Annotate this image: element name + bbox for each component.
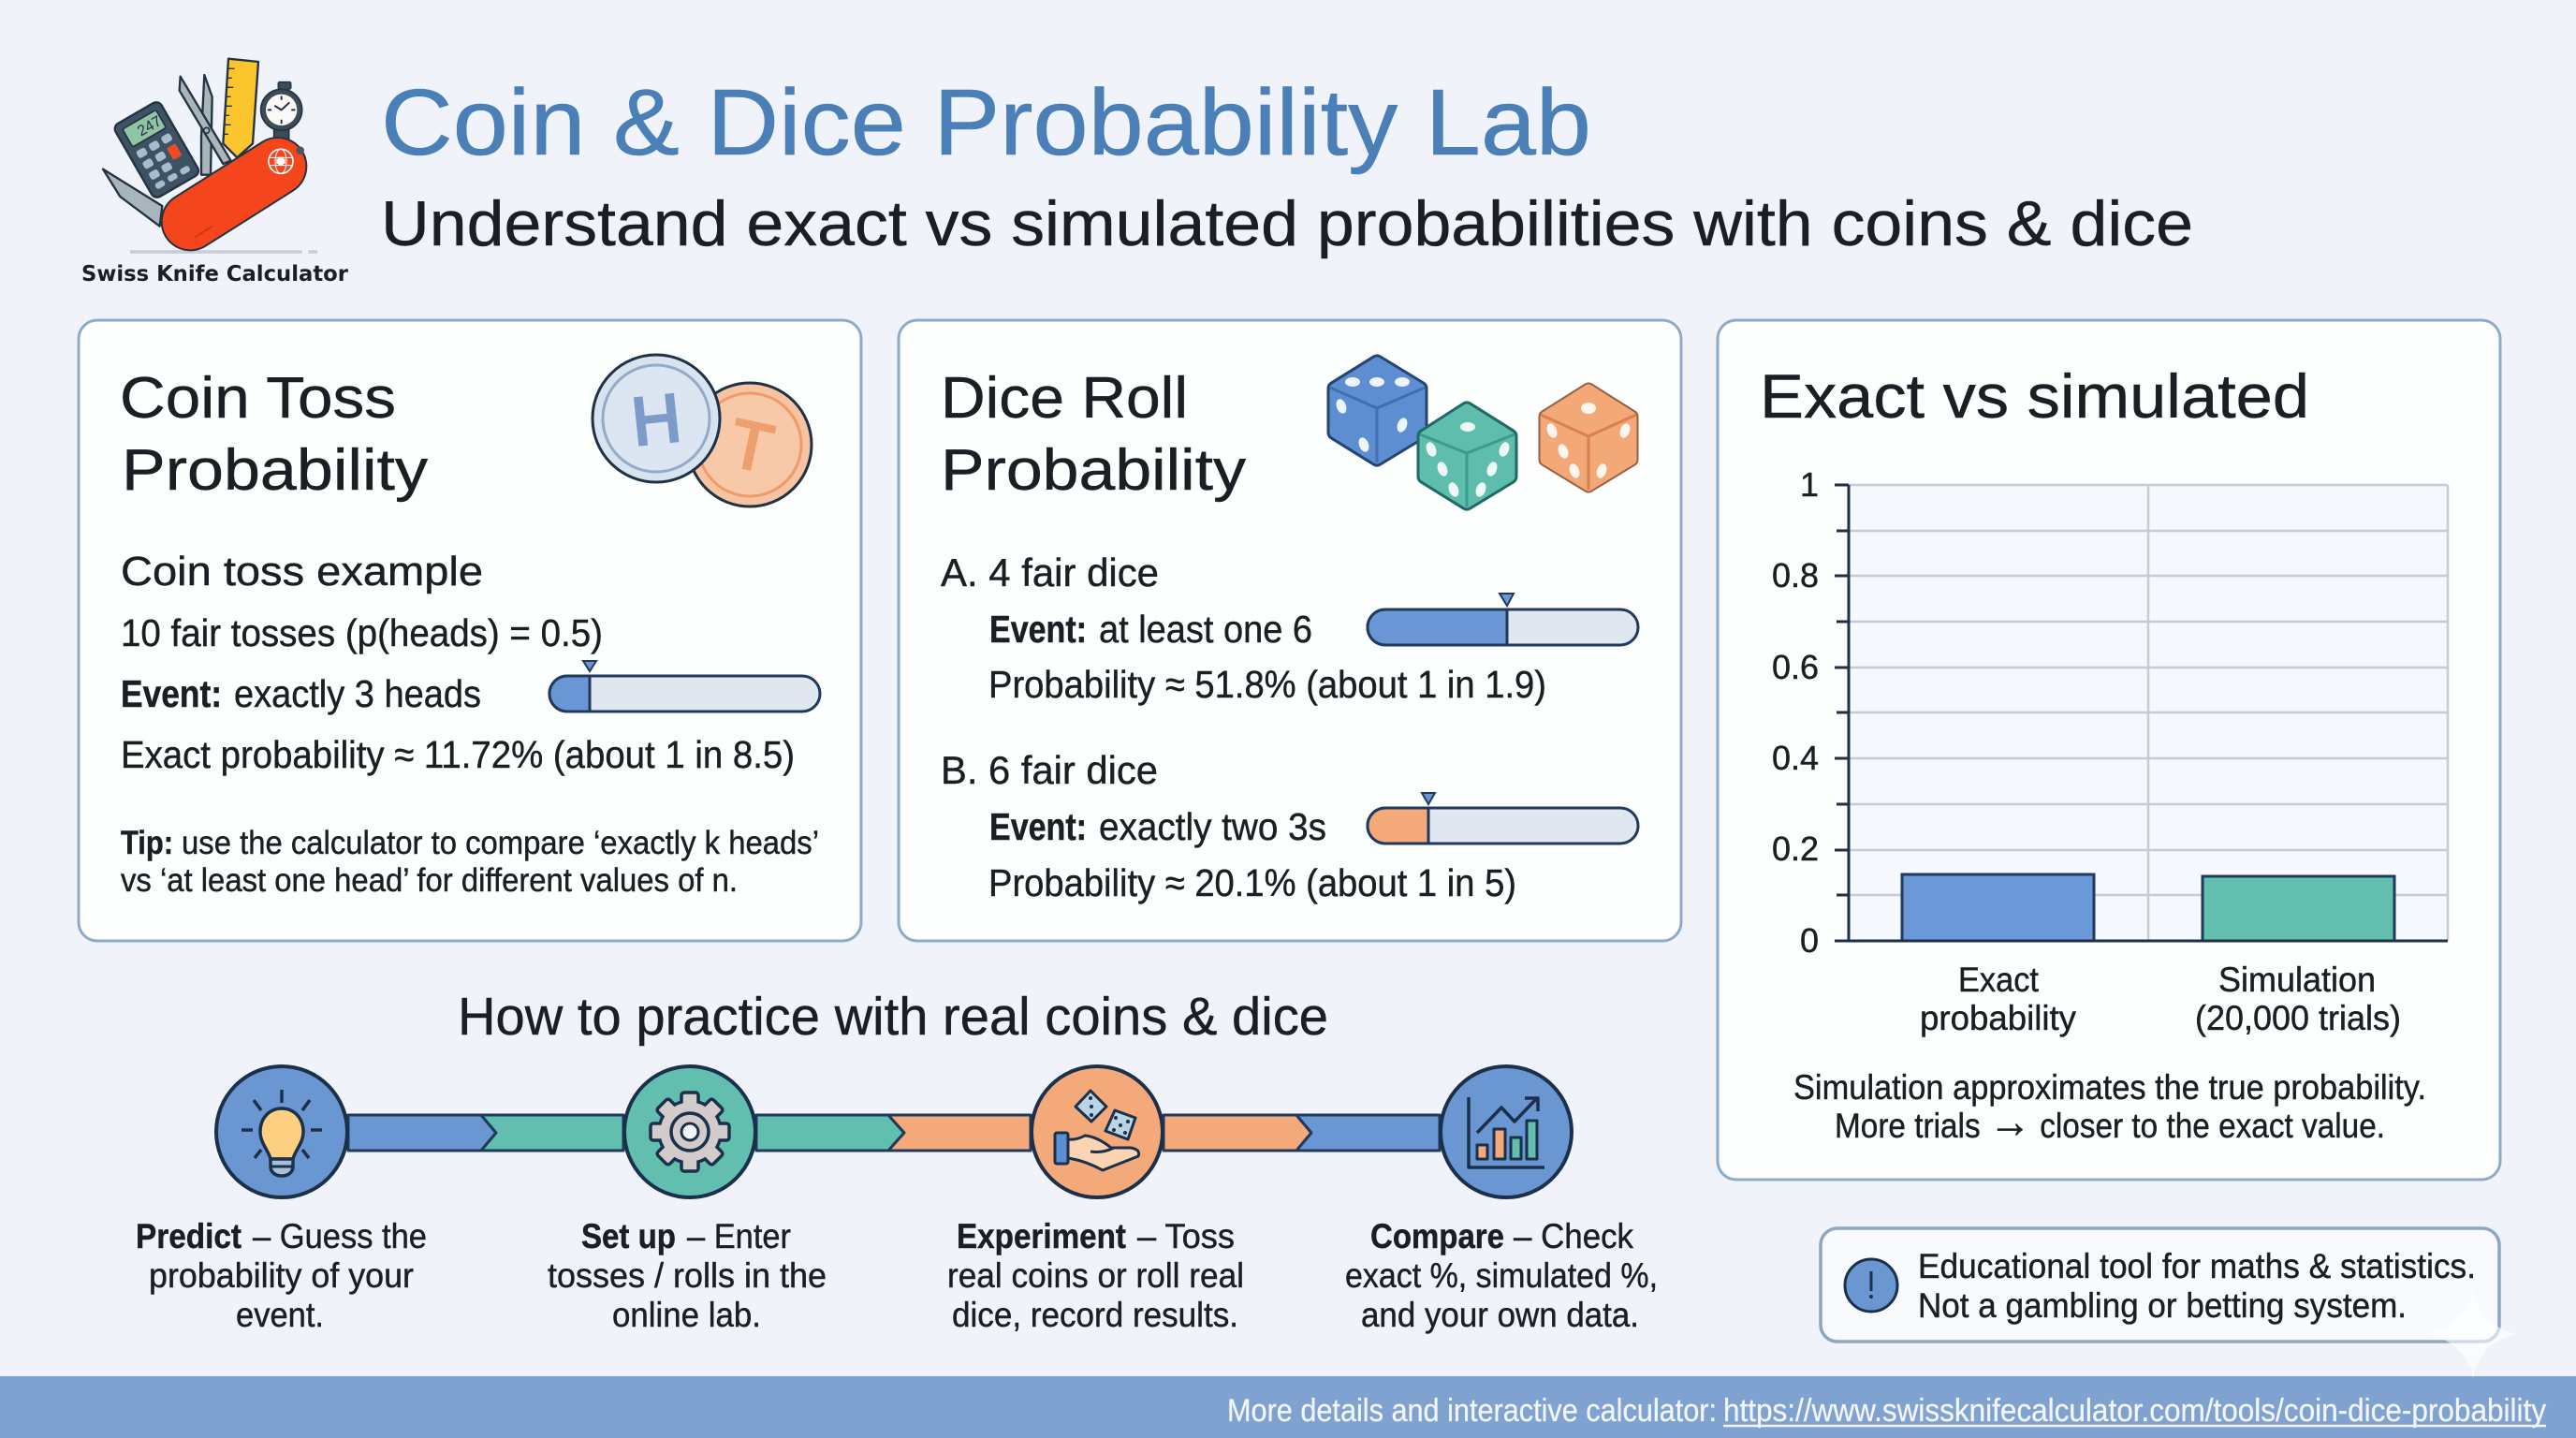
coin toss example text: Event:: [121, 672, 222, 715]
panel: coin toss probability: [79, 320, 861, 941]
step text: compare: [1345, 1217, 1658, 1334]
section B text: Probability ≈ 20.1% (about 1 in 5): [988, 861, 1516, 904]
section A text: Probability ≈ 51.8% (about 1 in 1.9): [988, 663, 1546, 706]
y axis labels: 0.2: [1772, 829, 1819, 868]
process timeline: [216, 1066, 1572, 1197]
icon: exclamation: [1845, 1259, 1897, 1312]
section B text: B. 6 fair dice: [941, 748, 1158, 792]
step text: experiment: dice, record results.: [952, 1296, 1238, 1334]
section B text: Event:: [989, 805, 1087, 848]
footer text and link: [1227, 1393, 2546, 1429]
coin toss example text: Coin toss example: [121, 549, 483, 594]
step text: experiment: – Toss: [1137, 1217, 1235, 1255]
section A text: [941, 550, 1546, 706]
callout text: Not a gambling or betting system.: [1918, 1286, 2407, 1325]
y axis labels: 0.8: [1772, 556, 1819, 594]
heading: dice roll: [941, 366, 1246, 503]
panel: exact vs simulated: [1718, 320, 2500, 1180]
step text: predict: – Guess the: [253, 1217, 427, 1255]
probability bar: 11.72%: [549, 661, 820, 712]
tip text: vs ‘at least one head’ for different values of n.: [121, 862, 738, 899]
chart note: Simulation approximates the true probability.: [1793, 1068, 2426, 1107]
step text: experiment: Experiment: [957, 1217, 1126, 1255]
y axis labels: [1772, 465, 1819, 960]
heading: dice roll: Dice Roll: [941, 366, 1188, 431]
x axis labels: (20,000 trials): [2195, 999, 2401, 1037]
bar chart: [1772, 465, 2448, 1037]
heading: exact vs simulated: Exact vs simulated: [1760, 361, 2309, 431]
coin toss example text: 10 fair tosses (p(heads) = 0.5): [121, 611, 603, 654]
icon: multi-tool knife: 247: [135, 113, 165, 139]
step text: compare: Compare: [1370, 1217, 1504, 1255]
section A text: Event:: [989, 608, 1087, 651]
step text: predict: event.: [236, 1296, 324, 1334]
step text: set up: – Enter: [687, 1217, 791, 1255]
panel: dice roll probability: [899, 320, 1681, 941]
step text: set up: [548, 1217, 827, 1334]
heading: coin toss: Coin Toss: [120, 366, 396, 431]
callout text: Educational tool for maths & statistics.: [1918, 1247, 2476, 1285]
heading: coin toss: Probability: [122, 438, 428, 503]
coin toss example text: [121, 549, 795, 776]
step text: compare: – Check: [1514, 1217, 1633, 1255]
arrow: set up to experiment: [756, 1115, 904, 1151]
decorative sparkle: [2427, 1287, 2516, 1378]
step text: experiment: real coins or roll real: [947, 1256, 1244, 1295]
arrow: compare band: [1296, 1115, 1440, 1151]
step text: predict: probability of your: [149, 1256, 414, 1295]
x axis labels: Exact: [1958, 961, 2040, 999]
heading: dice roll: Probability: [941, 438, 1246, 503]
y axis labels: 0.6: [1772, 648, 1819, 686]
step text: compare: exact %, simulated %,: [1345, 1256, 1658, 1295]
bar: exact probability: [1902, 874, 2094, 941]
probability bar: 20.1%: [1368, 793, 1638, 844]
step text: set up: tosses / rolls in the: [548, 1256, 827, 1295]
x axis labels: [1920, 961, 2401, 1037]
callout: educational disclaimer: [1821, 1228, 2499, 1342]
logo caption: Swiss Knife Calculator: [81, 262, 349, 286]
x axis labels: Simulation: [2218, 961, 2376, 999]
section B text: exactly two 3s: [1099, 805, 1326, 848]
title: Coin & Dice Probability Lab: [381, 70, 1591, 175]
tip text: [121, 825, 819, 899]
arrow: predict to set up: [348, 1115, 496, 1151]
x axis labels: probability: [1920, 999, 2076, 1037]
footer bar: [0, 1376, 2576, 1438]
heading: coin toss: [120, 366, 428, 503]
callout text: [1918, 1247, 2476, 1325]
icon: rising bar chart: [1441, 1066, 1572, 1197]
icon: heads and tails coins: T: [724, 405, 779, 488]
icon: hand tossing dice: [1032, 1066, 1163, 1197]
icon: three dice: [1330, 362, 1636, 506]
coin toss example text: exactly 3 heads: [234, 672, 481, 715]
heading: how to practice: How to practice with real coins & dice: [458, 987, 1328, 1047]
tip text: Tip:: [121, 825, 173, 861]
y axis labels: 0: [1800, 921, 1819, 960]
chart note: [1793, 1068, 2426, 1148]
icon: light bulb: [216, 1066, 347, 1197]
tip text: use the calculator to compare ‘exactly k heads’: [182, 825, 819, 861]
step text: predict: Predict: [136, 1217, 242, 1255]
section B text: [941, 748, 1516, 904]
section A text: at least one 6: [1099, 608, 1312, 651]
step text: experiment: [947, 1217, 1244, 1334]
icon: multi-tool knife: [103, 59, 317, 252]
arrow: experiment to compare: [1164, 1115, 1311, 1151]
y axis labels: 0.4: [1772, 739, 1819, 777]
step text: set up: online lab.: [612, 1296, 761, 1334]
bar: simulation: [2203, 876, 2394, 941]
icon: heads and tails coins: [593, 355, 812, 506]
step text: set up: Set up: [581, 1217, 676, 1255]
icon: heads and tails coins: H: [628, 380, 684, 460]
coin toss example text: Exact probability ≈ 11.72% (about 1 in 8.5): [121, 733, 795, 776]
step text: compare: and your own data.: [1361, 1296, 1639, 1334]
arrow: experiment band: [888, 1115, 1031, 1151]
step text: predict: [136, 1217, 427, 1334]
chart note: More trials → closer to the exact value.: [1835, 1095, 2385, 1148]
icon: gear: [624, 1066, 755, 1197]
probability bar: 51.8%: [1368, 594, 1638, 645]
subtitle: Understand exact vs simulated probabilities with coins & dice: [381, 188, 2193, 259]
arrow: set up band: [481, 1115, 623, 1151]
logo: Swiss Knife Calculator: [81, 59, 349, 286]
section A text: A. 4 fair dice: [941, 550, 1159, 594]
y axis labels: 1: [1800, 465, 1819, 504]
footer text and link: More details and interactive calculator:: [1227, 1393, 1717, 1429]
